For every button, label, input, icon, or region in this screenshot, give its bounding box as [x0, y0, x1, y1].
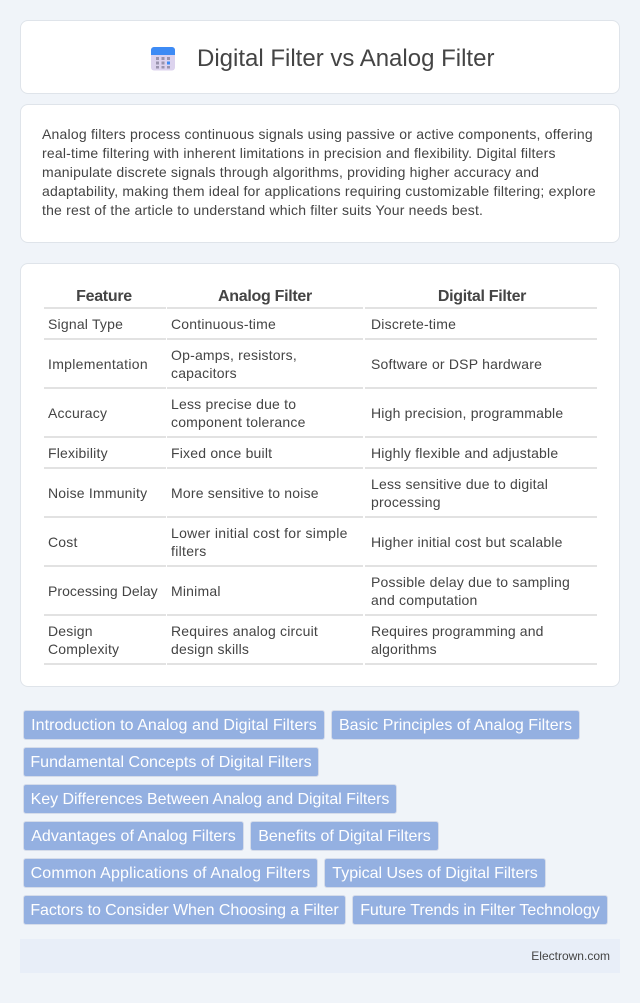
table rows: and computation — [371, 592, 478, 608]
table headers: Analog Filter — [218, 288, 312, 305]
table rows: Flexibility — [48, 445, 108, 461]
panel: comparison table — [20, 263, 620, 687]
table rows: Software or DSP hardware — [371, 356, 542, 372]
intro text: adaptability, making them ideal for applications requiring customizable filtering; explore — [42, 183, 596, 199]
table rows: Implementation — [48, 356, 148, 372]
table rows: processing — [371, 494, 441, 510]
title: Digital Filter vs Analog Filter — [197, 45, 494, 72]
table rows: Signal Type — [48, 316, 123, 332]
intro text: manipulate discrete signals through algorithms, providing higher accuracy and — [42, 164, 539, 180]
table headers: Feature — [76, 288, 132, 305]
topic tags: Advantages of Analog Filters — [31, 828, 236, 845]
table rows: Design — [48, 623, 93, 639]
table rows: Higher initial cost but scalable — [371, 534, 563, 550]
table rows: filters — [171, 543, 207, 559]
table rows: Cost — [48, 534, 78, 550]
table rows — [44, 307, 597, 665]
table rows: Possible delay due to sampling — [371, 574, 570, 590]
table rows: capacitors — [171, 365, 237, 381]
topic tags: Introduction to Analog and Digital Filters — [31, 717, 317, 734]
topic tags: Typical Uses of Digital Filters — [332, 865, 538, 882]
topic tags: Fundamental Concepts of Digital Filters — [30, 754, 312, 771]
table rows: Noise Immunity — [48, 485, 147, 501]
title panel — [20, 20, 620, 94]
table rows: algorithms — [371, 641, 437, 657]
table rows: Op-amps, resistors, — [171, 347, 297, 363]
intro text — [42, 126, 596, 218]
table rows: Minimal — [171, 583, 221, 599]
intro text: the rest of the article to understand which filter suits Your needs best. — [42, 202, 483, 218]
table rows: Accuracy — [48, 405, 107, 421]
table rows: Fixed once built — [171, 445, 272, 461]
footer — [20, 939, 620, 973]
table rows: design skills — [171, 641, 249, 657]
topic tags: Common Applications of Analog Filters — [31, 865, 310, 882]
topic tags: Benefits of Digital Filters — [258, 828, 431, 845]
table rows: Requires programming and — [371, 623, 544, 639]
table rows: Less sensitive due to digital — [371, 476, 548, 492]
icon: calendar — [151, 47, 175, 70]
intro text: real-time filtering with inherent limitations in precision and flexibility. Digital filters — [42, 145, 556, 161]
topic tags: Future Trends in Filter Technology — [360, 902, 600, 919]
table rows: Requires analog circuit — [171, 623, 318, 639]
table rows: Processing Delay — [48, 583, 158, 599]
panel: introduction — [20, 104, 620, 243]
table headers — [76, 288, 526, 305]
footer brand: Electrown.com — [531, 949, 610, 963]
table rows: More sensitive to noise — [171, 485, 319, 501]
intro text: Analog filters process continuous signals using passive or active components, offering — [42, 126, 593, 142]
table headers: Digital Filter — [438, 288, 526, 305]
table rows: Continuous-time — [171, 316, 276, 332]
table rows: High precision, programmable — [371, 405, 563, 421]
table rows: Highly flexible and adjustable — [371, 445, 558, 461]
topic tags: Factors to Consider When Choosing a Filter — [30, 902, 339, 919]
topic tags: Key Differences Between Analog and Digital Filters — [31, 791, 389, 808]
table rows: Discrete-time — [371, 316, 456, 332]
table rows: Lower initial cost for simple — [171, 525, 348, 541]
table rows: Less precise due to — [171, 396, 296, 412]
topic tags — [23, 710, 608, 925]
table rows: Complexity — [48, 641, 119, 657]
topic tags: Basic Principles of Analog Filters — [339, 717, 572, 734]
table rows: component tolerance — [171, 414, 306, 430]
